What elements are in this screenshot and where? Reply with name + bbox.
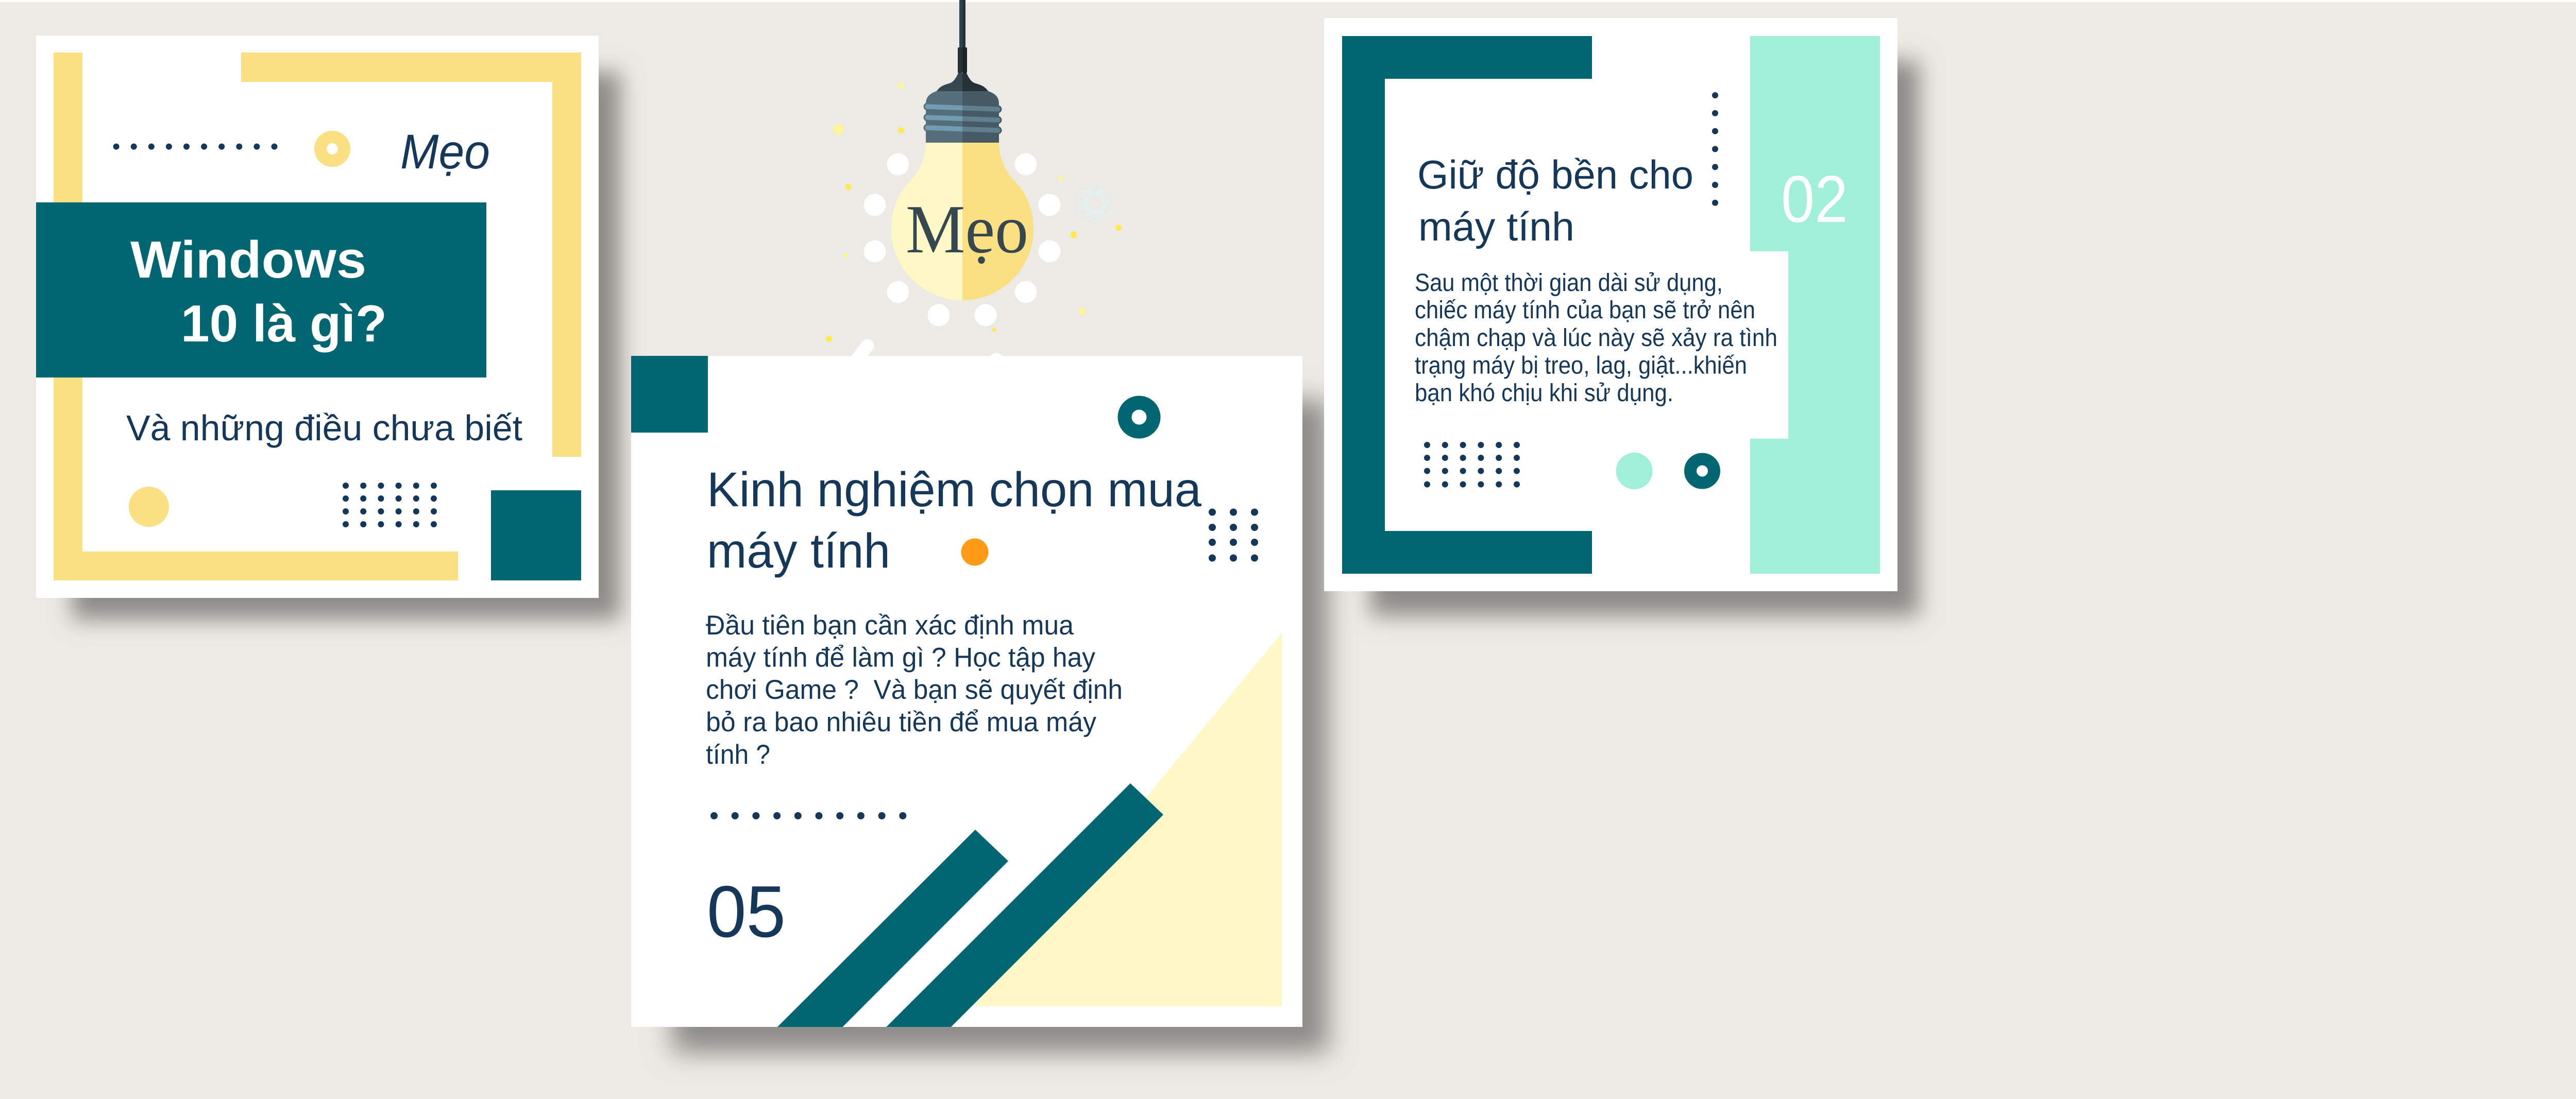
vertical dotted line [1712, 95, 1718, 204]
heading: Kinh nghiệm chọn mua [707, 462, 1201, 517]
panel: card 02 durability [1324, 18, 1919, 616]
white glow circles [851, 153, 1060, 367]
panel: Windows 10 intro card [36, 36, 620, 620]
dot grid [1427, 445, 1518, 484]
icon: atom [1075, 184, 1115, 221]
orange dot [961, 539, 988, 565]
dotted line [714, 812, 904, 819]
bulb glass right [891, 143, 1033, 300]
icon: teal ring [1125, 403, 1154, 432]
body text: bạn khó chịu khi sử dụng. [1415, 380, 1673, 407]
socket left half [926, 73, 999, 143]
dotted line [116, 144, 275, 150]
body text: chơi Game ? Và bạn sẽ quyết định [706, 675, 1123, 705]
body text: Đầu tiên bạn cần xác định mua [706, 610, 1074, 641]
heading: máy tính [707, 524, 890, 578]
bulb label: Mẹo: Mẹo [906, 191, 1028, 267]
infographic artwork [36, 0, 1933, 1069]
mint dot [1616, 453, 1653, 489]
teal bracket [1342, 36, 1592, 574]
yellow dot [129, 487, 169, 527]
title banner: Windows [130, 231, 366, 289]
body text: chậm chạp và lúc này sẽ xảy ra tình [1415, 324, 1777, 352]
icon: yellow ring [320, 137, 344, 161]
dot grid [346, 486, 435, 524]
teal diagonal stripes [777, 783, 1163, 1027]
teal square [491, 490, 581, 580]
body text: chiếc máy tính của bạn sẽ trở nên [1415, 297, 1755, 324]
heading [1417, 152, 1693, 249]
teal square [631, 356, 708, 433]
title banner [36, 202, 486, 377]
label: Mẹo: Mẹo [400, 125, 490, 179]
number 05: 05 [707, 871, 786, 953]
body text: tính ? [706, 740, 770, 770]
body text: bỏ ra bao nhiêu tiền để mua máy [706, 707, 1096, 737]
heading: máy tính [1418, 204, 1574, 249]
body text: máy tính để làm gì ? Học tập hay [706, 643, 1095, 673]
body text: trạng máy bị treo, lag, giật...khiến [1415, 352, 1747, 379]
title banner: 10 là gì? [181, 295, 387, 353]
socket right half [926, 73, 999, 143]
icon: teal ring [1690, 459, 1714, 483]
cord [958, 0, 967, 73]
heading [707, 462, 1201, 578]
body text [706, 610, 1123, 770]
dot grid [1212, 512, 1256, 558]
yellow frame bottom-left [54, 53, 458, 580]
bulb glass left [891, 143, 1033, 300]
body text: Sau một thời gian dài sử dụng, [1415, 269, 1723, 297]
number 02: 02 [1781, 162, 1848, 236]
illustration: hanging light bulb [826, 0, 1122, 367]
heading: Giữ độ bền cho [1417, 152, 1693, 197]
yellow frame top-right [241, 53, 581, 457]
subtitle: Và những điều chưa biết [126, 408, 522, 448]
mint column with notch [1750, 36, 1880, 574]
sparkle dots [826, 82, 1122, 342]
body text [1415, 269, 1777, 407]
panel: card 05 buying advice [631, 356, 1328, 1053]
pale yellow triangle [974, 633, 1282, 1006]
